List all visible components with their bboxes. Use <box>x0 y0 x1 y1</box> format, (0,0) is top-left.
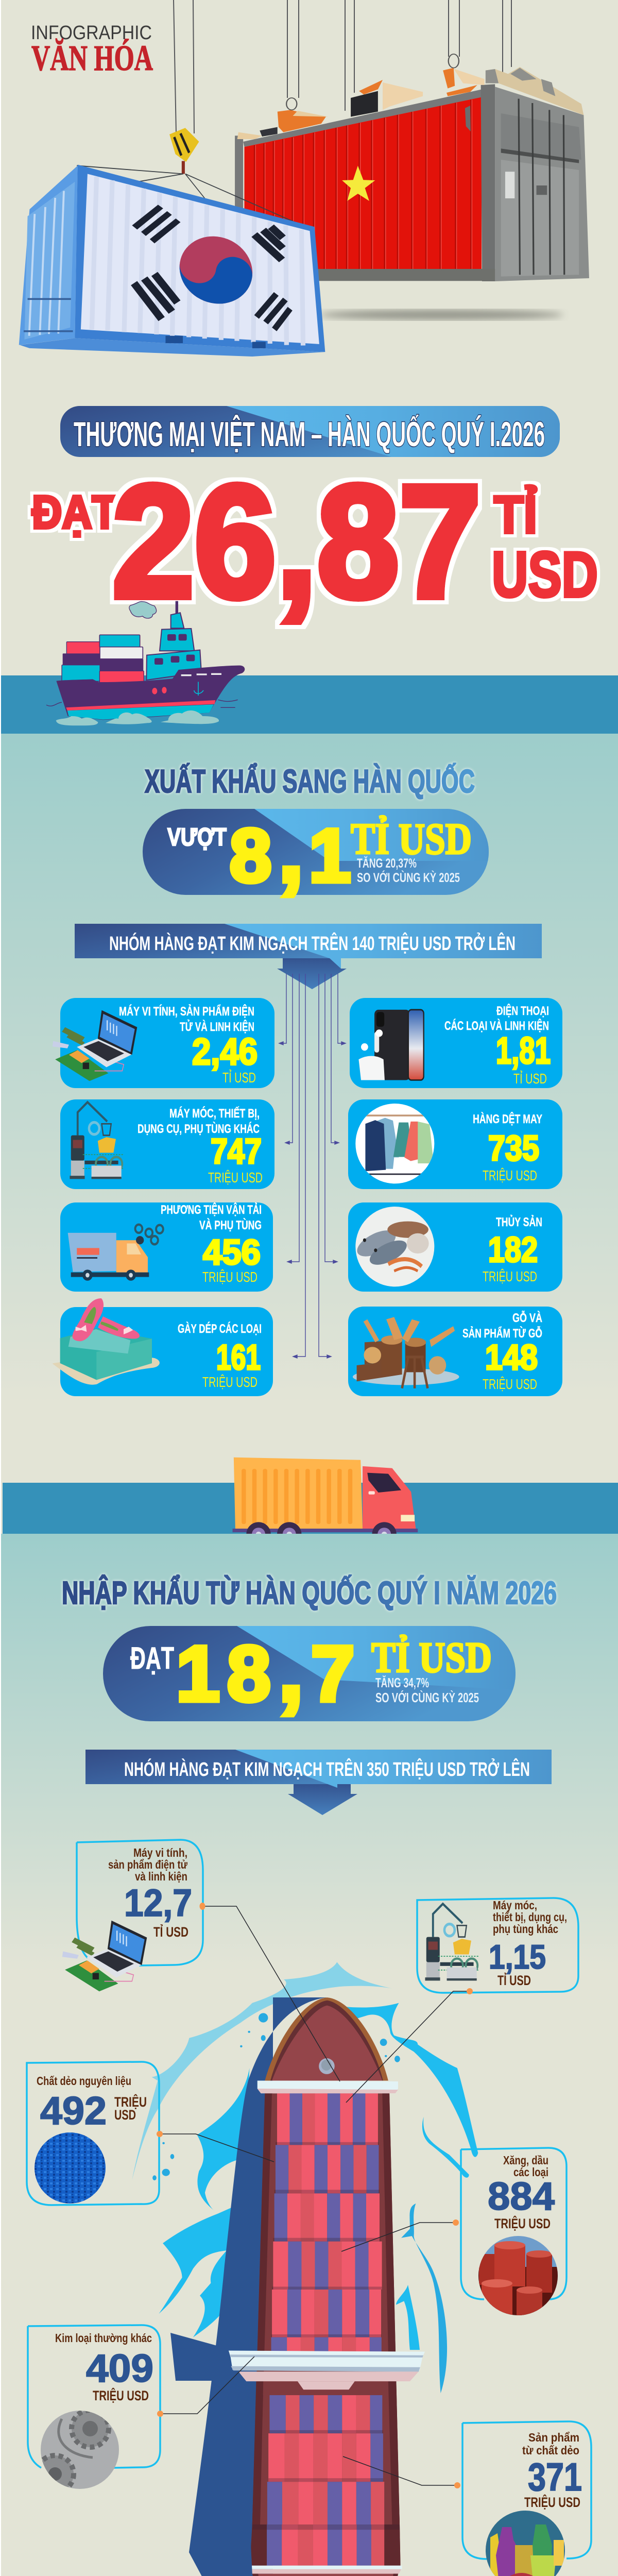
card: máy vi tính: TỬ VÀ LINH KIỆN <box>180 1019 254 1034</box>
icon: container truck <box>233 1458 418 1547</box>
crane cables <box>174 0 511 133</box>
growth note: TĂNG 34,7% <box>375 1675 429 1690</box>
icon: laptop <box>62 1921 147 1991</box>
banner: nhóm hàng trên 350 triệu USD <box>85 1750 552 1815</box>
card: điện thoại: 1,81 <box>496 1030 551 1072</box>
unit: tỉ USD: TỈ USD <box>371 1634 492 1682</box>
pill: đạt 18,7 tỉ USD <box>103 1617 516 1721</box>
card: gỗ: GỖ VÀ <box>512 1310 542 1325</box>
card: phương tiện vận tải <box>60 1202 273 1292</box>
card: phương tiện vận tải: 456 <box>203 1232 261 1272</box>
label: đạt: ĐẠT <box>130 1641 174 1675</box>
callout: chất dẻo nguyên liệu: USD <box>114 2107 136 2123</box>
logo: Infographic Văn Hóa <box>31 22 153 78</box>
title pill: Thương mại Việt Nam – Hàn Quốc <box>60 406 560 457</box>
water splashes around ship <box>132 1962 478 2393</box>
unit: tỉ USD: TỈ USD <box>351 814 472 863</box>
card: gỗ <box>348 1307 562 1396</box>
card: gỗ: SẢN PHẨM TỪ GỖ <box>462 1326 542 1341</box>
icon: plastic pellets <box>35 2132 106 2204</box>
callout: chất dẻo nguyên liệu: 492 <box>40 2089 107 2133</box>
band under truck <box>3 1483 618 1534</box>
icon: phone and earbuds <box>358 1010 424 1080</box>
icon: laptop <box>53 1010 137 1081</box>
card: phương tiện vận tải: TRIỆU USD <box>202 1269 258 1285</box>
icon: robot arm machine <box>70 1102 124 1179</box>
banner: nhóm hàng trên 140 triệu USD <box>75 924 542 989</box>
callout: máy vi tính <box>62 1840 203 1991</box>
card: phương tiện vận tải: PHƯƠNG TIỆN VẬN TẢI <box>161 1202 262 1217</box>
growth note: SO VỚI CÙNG KỲ 2025 <box>357 870 460 885</box>
card: máy móc, thiết bị: MÁY MÓC, THIẾT BỊ, <box>169 1106 260 1121</box>
label: vượt: VƯỢT <box>167 824 227 851</box>
ship hull and containers <box>229 1997 425 2524</box>
callout: kim loại thường khác <box>28 2325 160 2493</box>
value: 26,87: 26,87 <box>112 452 481 631</box>
value: 18,7: 18,7 <box>176 1617 355 1721</box>
card: máy móc, thiết bị: TRIỆU USD <box>208 1170 263 1185</box>
ship fin <box>170 2333 236 2381</box>
icon: Vietnam flag container <box>235 54 589 281</box>
callout: xăng dầu <box>461 2148 566 2316</box>
card: điện thoại: ĐIỆN THOẠI <box>496 1004 549 1018</box>
connector lines to export cards <box>279 974 346 1358</box>
card: phương tiện vận tải: VÀ PHỤ TÙNG <box>199 1218 262 1232</box>
callout: máy vi tính: sản phẩm điện tử <box>108 1858 187 1871</box>
card: giày dép: TRIỆU USD <box>202 1374 258 1390</box>
icon: plastic products <box>486 2511 565 2576</box>
callout: sản phẩm từ chất dẻo <box>462 2421 591 2576</box>
card: gỗ: 148 <box>485 1337 538 1377</box>
callout: xăng dầu: các loại <box>513 2165 548 2179</box>
card: máy vi tính <box>53 998 274 1088</box>
card: thủy sản: 182 <box>488 1230 538 1269</box>
callout: kim loại thường khác: TRIỆU USD <box>93 2387 149 2403</box>
callout: sản phẩm từ chất dẻo: 371 <box>528 2455 582 2499</box>
icon: shoes on box <box>53 1298 160 1385</box>
sea band <box>1 675 618 734</box>
card: điện thoại <box>350 998 562 1088</box>
callout: máy móc: phụ tùng khác <box>493 1922 558 1936</box>
icon: robot arm machine <box>425 1904 479 1980</box>
icon: crane hook <box>77 128 307 228</box>
callout: xăng dầu: 884 <box>488 2175 555 2218</box>
callout: sản phẩm từ chất dẻo: từ chất dẻo <box>522 2444 579 2457</box>
growth note <box>375 1675 479 1705</box>
hero photo: two hanging containers <box>19 0 589 357</box>
headline value: đạt 26,87 tỉ USD <box>32 452 598 631</box>
card: máy vi tính: MÁY VI TÍNH, SẢN PHẨM ĐIỆN <box>119 1004 254 1019</box>
icon: seafood <box>354 1207 434 1286</box>
heading: xuất khẩu sang Hàn Quốc: XUẤT KHẨU SANG HÀN QUỐC <box>145 763 475 800</box>
card: gỗ: TRIỆU USD <box>483 1376 537 1392</box>
card: máy móc, thiết bị <box>60 1099 274 1189</box>
callout: kim loại thường khác: Kim loại thường khác <box>55 2331 152 2345</box>
callout: máy móc: Máy móc, <box>493 1899 537 1912</box>
callout: máy móc: thiết bị, dụng cụ, <box>493 1910 567 1924</box>
icon: South Korea flag container <box>19 128 325 357</box>
section background: imports <box>1 1534 618 1972</box>
icon: delivery truck <box>68 1225 163 1281</box>
card: điện thoại: CÁC LOẠI VÀ LINH KIỆN <box>444 1019 549 1033</box>
card: thủy sản: THỦY SẢN <box>496 1214 542 1229</box>
callout: máy móc <box>417 1898 578 1993</box>
card: giày dép: GÀY DÉP CÁC LOẠI <box>178 1321 262 1336</box>
growth note: TĂNG 20,37% <box>357 856 417 871</box>
callout: máy móc: 1,15 <box>489 1938 546 1976</box>
ship shadow hull <box>189 1997 327 2576</box>
card: hàng dệt may: 735 <box>488 1128 539 1168</box>
card: thủy sản <box>348 1202 562 1292</box>
card: máy móc, thiết bị: 747 <box>211 1131 262 1171</box>
callout: xăng dầu: Xăng, dầu <box>503 2154 548 2167</box>
callout: sản phẩm từ chất dẻo: TRIỆU USD <box>524 2494 580 2510</box>
callout: xăng dầu: TRIỆU USD <box>494 2215 551 2231</box>
card: hàng dệt may: TRIỆU USD <box>483 1167 537 1183</box>
illustration: cargo ship seen from above <box>168 1997 425 2576</box>
icon: metal gears <box>37 2410 119 2493</box>
label: đạt: ĐẠT <box>32 487 117 538</box>
card: giày dép <box>53 1298 273 1396</box>
callout: máy vi tính: TỈ USD <box>153 1923 188 1940</box>
icon: clothes rail <box>355 1104 436 1183</box>
icon: cargo ship <box>46 601 245 725</box>
callout: máy vi tính: 12,7 <box>124 1882 192 1924</box>
callout: chất dẻo nguyên liệu: TRIỆU <box>114 2094 147 2110</box>
callout: chất dẻo nguyên liệu <box>27 2062 159 2205</box>
ship stern <box>168 2524 402 2576</box>
card: thủy sản: TRIỆU USD <box>483 1268 537 1284</box>
icon: oil barrels <box>478 2236 558 2316</box>
callout: chất dẻo nguyên liệu: Chất dẻo nguyên liệu <box>37 2074 131 2088</box>
leader lines with dots <box>157 1903 473 2488</box>
card: hàng dệt may: HÀNG DỆT MAY <box>473 1112 542 1126</box>
card: giày dép: 161 <box>216 1337 261 1377</box>
value: 8,1: 8,1 <box>230 798 351 902</box>
callout: kim loại thường khác: 409 <box>86 2347 153 2391</box>
card: máy vi tính: TỈ USD <box>222 1069 256 1086</box>
card: điện thoại: TỈ USD <box>513 1070 547 1087</box>
card: máy móc, thiết bị: DỤNG CỤ, PHỤ TÙNG KHÁC <box>138 1122 260 1136</box>
logo: Infographic Văn Hóa: INFOGRAPHIC <box>31 22 152 44</box>
growth note <box>357 856 460 885</box>
pill: vượt 8,1 tỉ USD <box>143 809 489 899</box>
callout: sản phẩm từ chất dẻo: Sản phẩm <box>528 2431 579 2444</box>
card: hàng dệt may <box>348 1099 562 1189</box>
icon: red container shadow <box>319 310 563 320</box>
section background: exports <box>1 734 618 1403</box>
callout: máy móc: TỈ USD <box>497 1972 531 1988</box>
card: máy vi tính: 2,46 <box>192 1031 258 1073</box>
logo: Infographic Văn Hóa: VĂN HÓA <box>31 39 153 78</box>
callout: máy vi tính: Máy vi tính, <box>133 1846 187 1859</box>
icon: timber logs <box>353 1317 459 1388</box>
callout: máy vi tính: và linh kiện <box>135 1870 187 1883</box>
growth note: SO VỚI CÙNG KỲ 2025 <box>375 1690 479 1705</box>
unit: tỉ: TỈ <box>494 485 537 544</box>
